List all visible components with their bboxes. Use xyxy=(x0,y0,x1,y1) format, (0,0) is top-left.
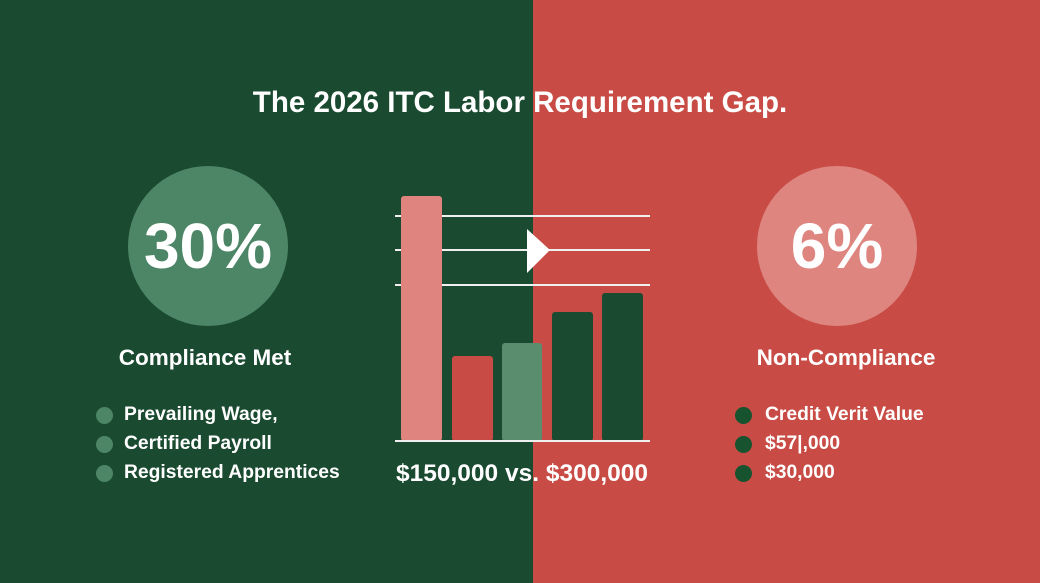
panel: non-compliance xyxy=(735,166,935,483)
list: requirements: Prevailing Wage, xyxy=(124,404,278,425)
stat circle 30% xyxy=(128,166,288,326)
list: requirements xyxy=(96,404,340,483)
bar chart xyxy=(395,196,650,487)
stat circle 30%: 30% xyxy=(144,210,272,282)
list: values: $30,000 xyxy=(765,462,835,483)
list: values: $57|,000 xyxy=(765,433,840,454)
title: The 2026 ITC Labor Requirement Gap. xyxy=(253,86,787,119)
list: requirements: Certified Payroll xyxy=(124,433,272,454)
list: requirements: Registered Apprentices xyxy=(124,462,340,483)
stat circle 6% xyxy=(757,166,917,326)
list: values xyxy=(735,404,924,483)
arrow xyxy=(527,229,550,273)
heading: compliance met: Compliance Met xyxy=(119,345,291,370)
bar chart: $150,000 vs. $300,000 xyxy=(396,460,648,487)
stat circle 6%: 6% xyxy=(791,210,883,282)
panel: compliance xyxy=(96,166,340,483)
heading: non-compliance: Non-Compliance xyxy=(757,345,935,370)
list: values: Credit Verit Value xyxy=(765,404,924,425)
